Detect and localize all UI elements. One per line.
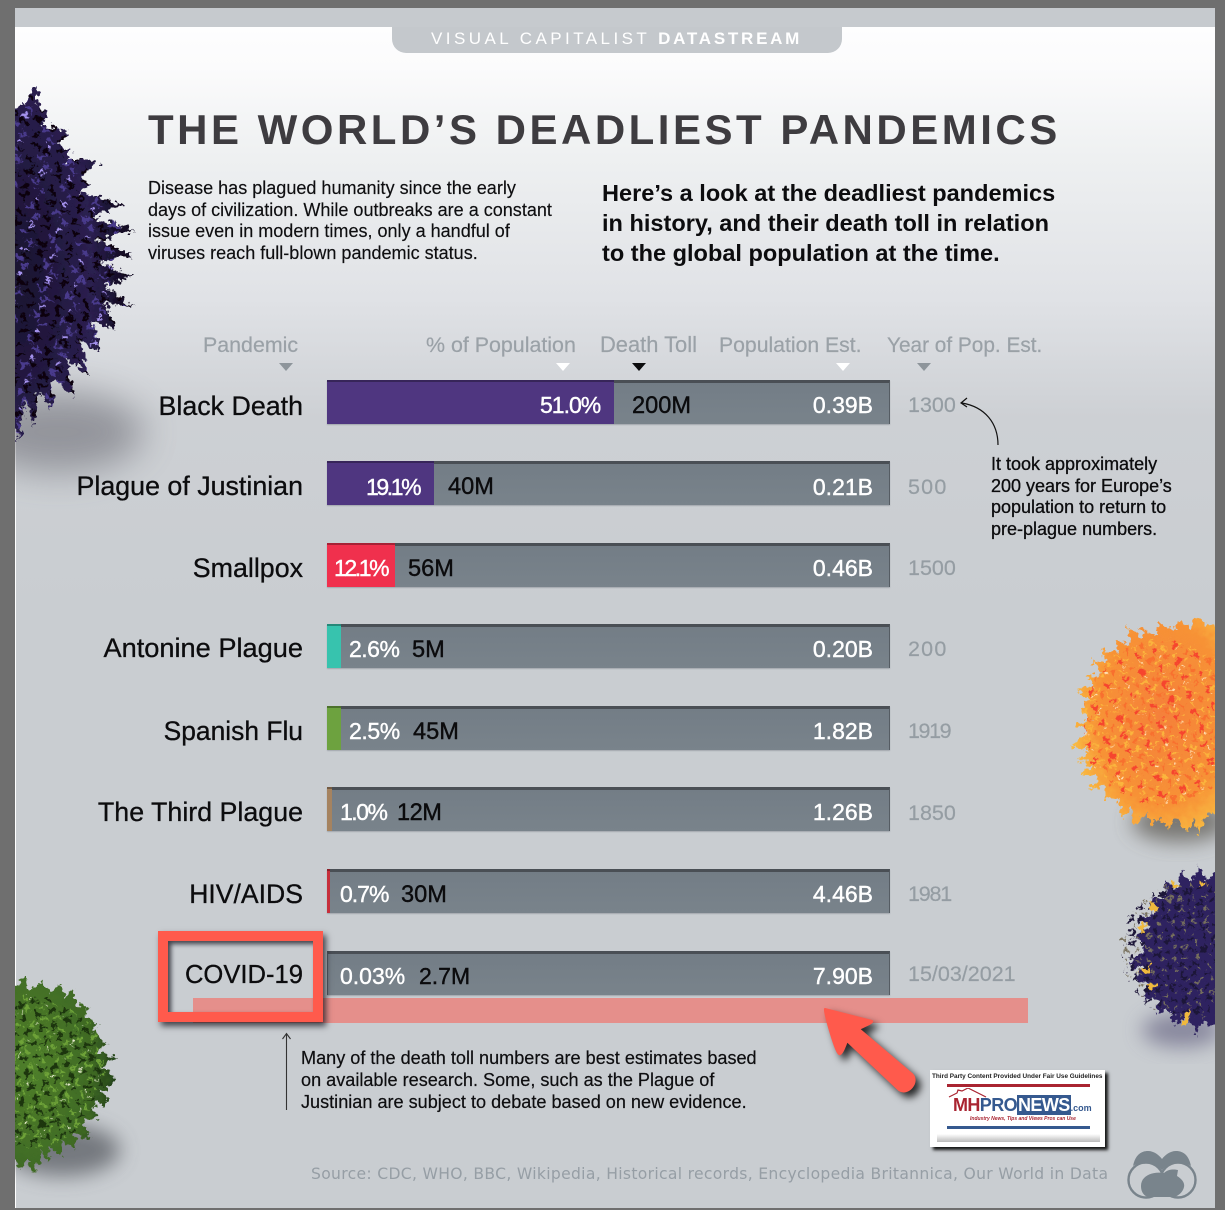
column headers: % of Population xyxy=(426,333,576,357)
row: COVID-19 xyxy=(185,951,1016,996)
note text: on available research. Some, such as the Plague of xyxy=(301,1070,714,1090)
column headers: Death Toll xyxy=(600,332,697,357)
arrow: vertical arrow xyxy=(282,1032,291,1110)
logo: MHProNews badge xyxy=(930,1070,1105,1147)
logo: MHProNews badge: MHPRONEWS.com xyxy=(953,1095,1092,1115)
callout: red box around COVID-19 xyxy=(158,931,323,1022)
row: The Third Plague xyxy=(98,787,956,832)
row: HIV/AIDS: HIV/AIDS xyxy=(189,879,303,909)
row: Smallpox: 0.46B xyxy=(813,555,873,581)
row: Spanish Flu xyxy=(164,706,951,752)
row: Black Death: 200M xyxy=(632,393,691,419)
icon: green virus bottom left xyxy=(15,976,118,1173)
row: HIV/AIDS: 1981 xyxy=(908,882,951,906)
logo: MHProNews badge: Third Party Content Provided Under Fair Use Guidelines xyxy=(932,1073,1102,1080)
row: Antonine Plague: 200 xyxy=(908,637,947,661)
row: Antonine Plague: 5M xyxy=(412,637,445,663)
icon: purple virus top left xyxy=(10,83,134,440)
row: HIV/AIDS: 0.7% xyxy=(340,881,388,907)
note text: It took approximately xyxy=(991,454,1157,474)
logo: MHProNews badge: Industry News, Tips and Views Pros can Use xyxy=(970,1116,1076,1122)
source line: Source: CDC, WHO, BBC, Wikipedia, Historical records, Encyclopedia Britannica, Our World in Data xyxy=(311,1165,1108,1183)
row: Antonine Plague: 2.6% xyxy=(349,636,399,662)
row: Spanish Flu: 45M xyxy=(413,719,459,745)
row: Smallpox: Smallpox xyxy=(193,553,303,583)
row: Spanish Flu: Spanish Flu xyxy=(164,716,303,746)
row: HIV/AIDS: 30M xyxy=(401,882,447,908)
row: The Third Plague: The Third Plague xyxy=(98,797,303,827)
row: The Third Plague: 1850 xyxy=(908,801,956,825)
top bar xyxy=(15,8,1215,27)
row: Black Death xyxy=(159,380,956,426)
row: Black Death: 51.0% xyxy=(540,392,600,418)
row: Plague of Justinian: 0.21B xyxy=(813,474,873,500)
highlight strip xyxy=(193,998,1028,1023)
column headers xyxy=(203,332,1042,371)
row: COVID-19: 2.7M xyxy=(419,963,470,989)
row: The Third Plague: 1.0% xyxy=(340,799,386,825)
column headers: Pandemic xyxy=(203,333,298,357)
intro text left: Disease has plagued humanity since the early xyxy=(148,178,516,198)
row: Plague of Justinian xyxy=(77,461,947,506)
row: Black Death: 1300 xyxy=(908,393,956,417)
note text: Many of the death toll numbers are best estimates based xyxy=(301,1048,757,1068)
row: Antonine Plague xyxy=(103,624,947,670)
row: Antonine Plague: Antonine Plague xyxy=(103,632,303,663)
row: Spanish Flu: 2.5% xyxy=(349,718,400,744)
row: Black Death: 0.39B xyxy=(813,392,873,418)
row: COVID-19: 15/03/2021 xyxy=(908,962,1016,986)
intro text right: Here’s a look at the deadliest pandemics xyxy=(602,180,1055,206)
row: Plague of Justinian: 19.1% xyxy=(366,474,419,500)
row: COVID-19: COVID-19 xyxy=(185,961,303,989)
arrow: curved arrow to 1300 xyxy=(960,398,999,445)
row: Spanish Flu: 1919 xyxy=(908,719,950,743)
row: Spanish Flu: 1.82B xyxy=(813,718,873,744)
row: HIV/AIDS: 4.46B xyxy=(813,881,873,907)
intro text left: days of civilization. While outbreaks are a constant xyxy=(148,200,552,220)
row: Smallpox xyxy=(193,543,956,588)
row: Smallpox: 56M xyxy=(408,556,454,582)
row: Antonine Plague: 0.20B xyxy=(813,636,873,662)
intro text right xyxy=(602,180,1055,266)
row: COVID-19: 0.03% xyxy=(340,963,405,989)
note text: pre-plague numbers. xyxy=(991,519,1157,539)
annotation: death toll estimates note xyxy=(282,1032,757,1112)
note text: population to return to xyxy=(991,497,1166,517)
row: Plague of Justinian: 500 xyxy=(908,475,947,499)
row: COVID-19: 7.90B xyxy=(813,963,873,989)
row: Smallpox: 12.1% xyxy=(334,555,387,581)
intro text left: viruses reach full-blown pandemic status. xyxy=(148,243,478,263)
row: Black Death: Black Death xyxy=(159,391,303,421)
header tab text: VISUAL CAPITALIST DATASTREAM xyxy=(431,29,802,48)
note text xyxy=(991,454,1172,540)
column headers: Year of Pop. Est. xyxy=(887,334,1042,357)
intro text right: in history, and their death toll in relation xyxy=(602,210,1049,236)
column headers: Population Est. xyxy=(719,334,862,357)
header tab xyxy=(392,27,842,53)
row: Smallpox: 1500 xyxy=(908,556,956,580)
decorative shadows xyxy=(0,392,1225,1176)
row: The Third Plague: 12M xyxy=(397,800,441,826)
title: THE WORLD’S DEADLIEST PANDEMICS xyxy=(148,106,1061,153)
row: Plague of Justinian: 40M xyxy=(448,474,494,500)
intro text left: issue even in modern times, only a handful of xyxy=(148,221,510,241)
intro text right: to the global population at the time. xyxy=(602,240,1000,266)
icon: orange virus right xyxy=(1070,616,1225,834)
intro text left xyxy=(148,178,552,264)
row: Plague of Justinian: Plague of Justinian xyxy=(77,471,303,501)
logo: binoculars and pig xyxy=(1127,1151,1197,1199)
note text: 200 years for Europe’s xyxy=(991,476,1172,496)
row: HIV/AIDS xyxy=(189,869,952,914)
icon: dark purple virus right xyxy=(1122,866,1225,1036)
note text xyxy=(301,1048,757,1112)
row: The Third Plague: 1.26B xyxy=(813,799,873,825)
annotation: Black Death year note xyxy=(960,398,1172,540)
note text: Justinian are subject to debate based on new evidence. xyxy=(301,1092,747,1112)
